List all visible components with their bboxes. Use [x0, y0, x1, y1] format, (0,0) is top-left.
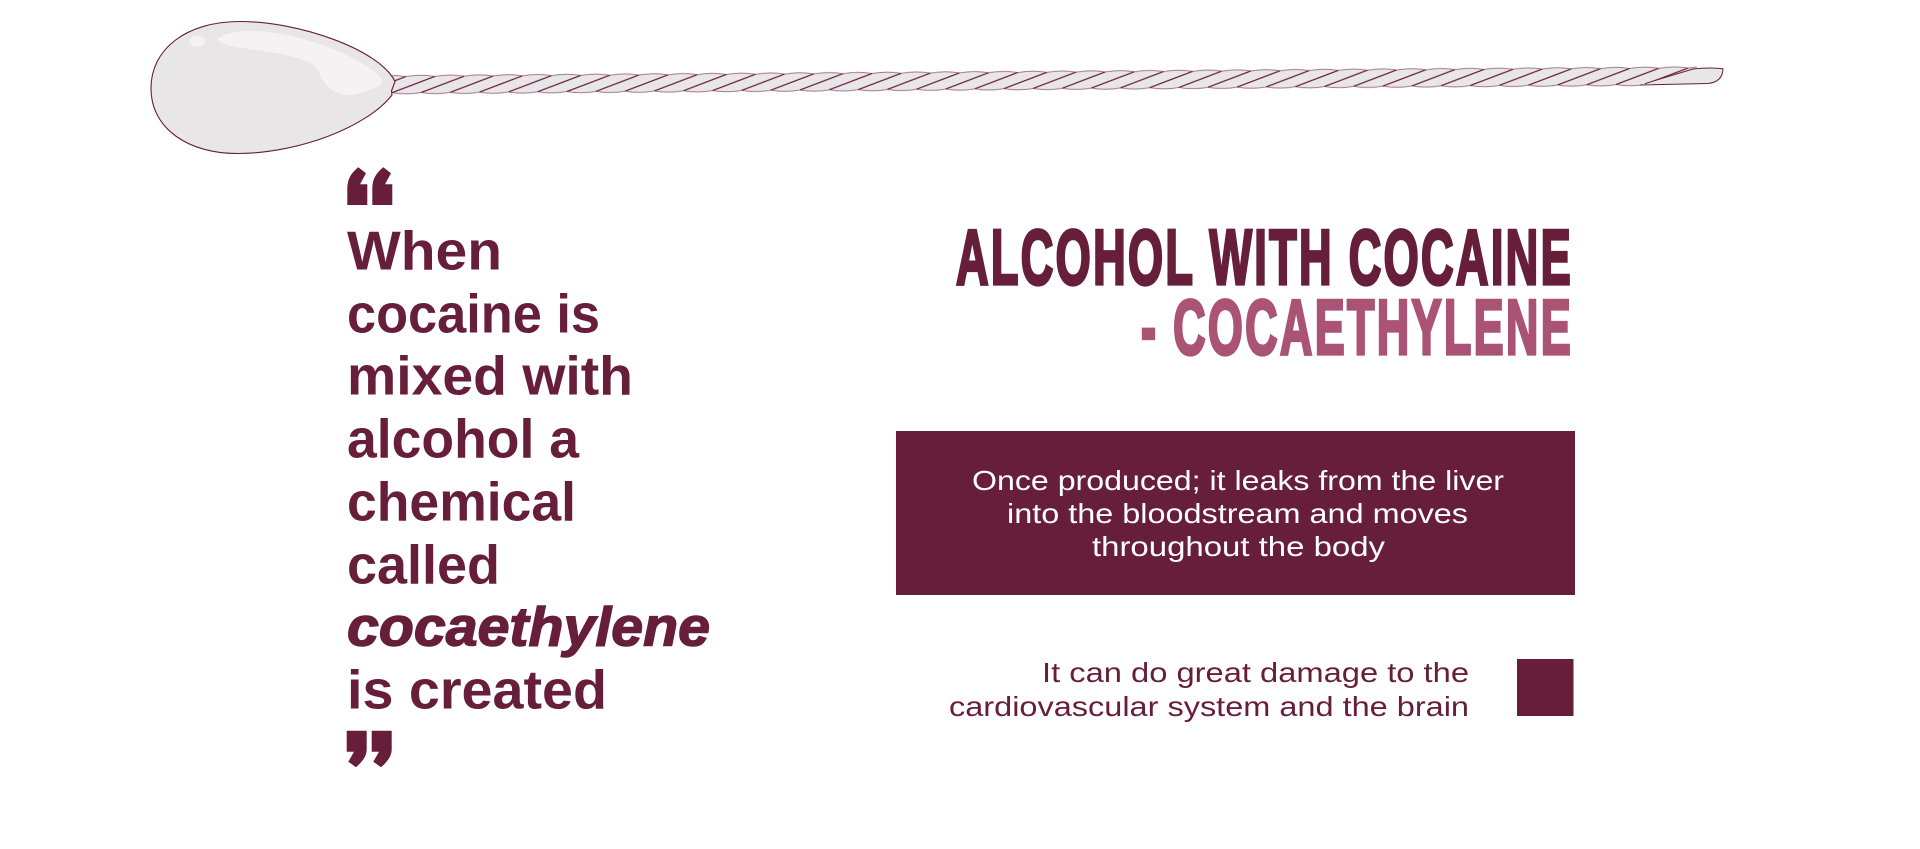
icon: twisted bar spoon — [151, 22, 1723, 154]
quote text: cocaine is — [347, 282, 600, 344]
quote block — [347, 167, 710, 767]
quote text — [347, 220, 710, 720]
spoon handle — [392, 66, 1724, 95]
text: damage note: It can do great damage to the — [1042, 657, 1469, 688]
quote text: called — [347, 534, 500, 596]
icon: square bullet — [1517, 659, 1574, 716]
callout text: Once produced; it leaks from the liver — [972, 465, 1504, 496]
spoon bowl — [151, 22, 395, 154]
quote text: is created — [347, 658, 607, 720]
quote text: alcohol a — [347, 408, 579, 470]
callout text: throughout the body — [1092, 531, 1385, 562]
callout text: into the bloodstream and moves — [1007, 498, 1468, 529]
icon: opening quotation mark — [347, 167, 392, 205]
callout text — [972, 465, 1504, 562]
quote text: When — [347, 220, 502, 282]
panel: liver callout — [896, 431, 1575, 595]
text: damage note: cardiovascular system and the brain — [949, 691, 1469, 722]
quote text: cocaethylene — [347, 596, 710, 658]
title: - COCAETHYLENE — [1141, 283, 1573, 371]
quote text: chemical — [347, 470, 576, 532]
quote text: mixed with — [347, 344, 633, 406]
title — [956, 213, 1573, 371]
text: damage note — [949, 657, 1469, 722]
icon: closing quotation mark — [347, 731, 392, 767]
